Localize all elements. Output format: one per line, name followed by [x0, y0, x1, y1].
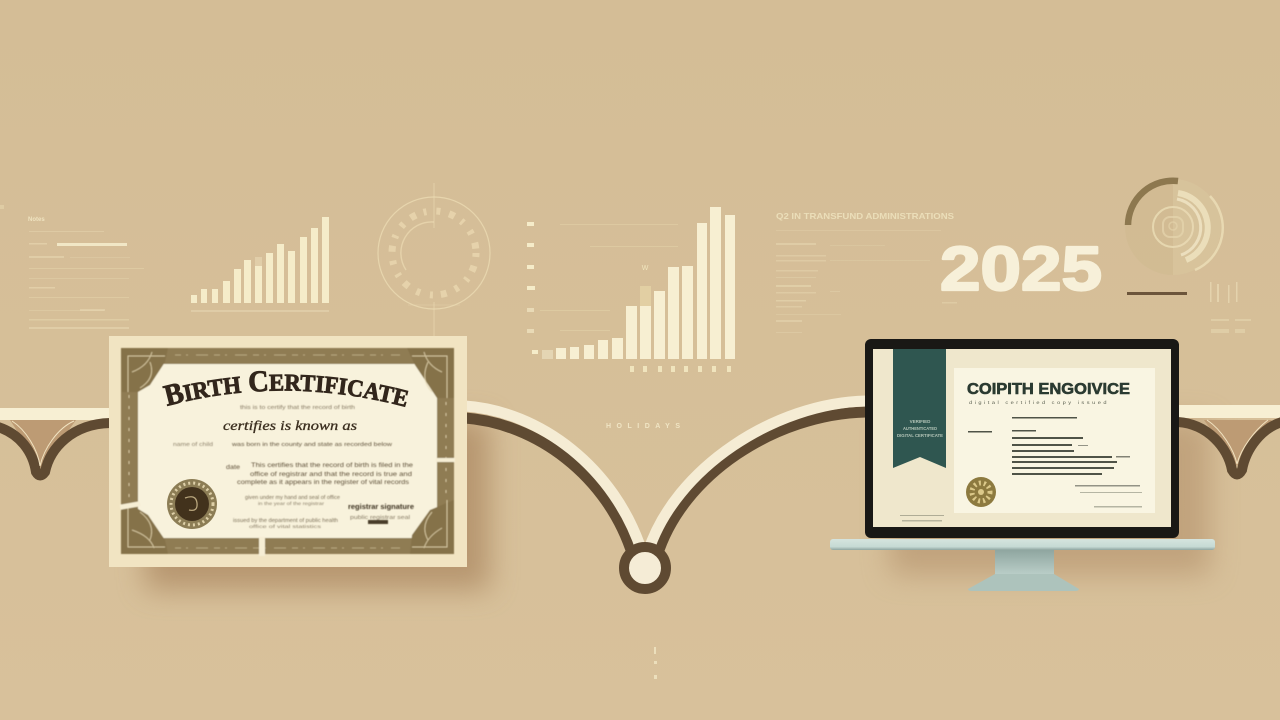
certificate body text: complete as it appears in the register of vital records: [237, 479, 410, 486]
certificate body text: name of child: [173, 442, 213, 448]
left radial gauge: [378, 183, 490, 336]
accent line under chart: [1127, 292, 1187, 295]
border tears: [436, 458, 455, 462]
left notes heading: Notes: [28, 217, 45, 223]
small tick marks right: [1210, 282, 1251, 333]
brown arc: [1128, 181, 1178, 225]
right notes heading: Q2 IN TRANSFUND ADMINISTRATIONS: [776, 211, 954, 221]
bars: [542, 207, 735, 359]
digital certificate title: COIPITH ENGOIVICE: [967, 381, 1130, 398]
stand: [995, 550, 1054, 574]
gold seal: [966, 477, 996, 507]
left notes panel: [0, 205, 144, 329]
certificate body text: given under my hand and seal of office: [245, 495, 340, 501]
bezel: [865, 339, 1179, 538]
certificate body text: office of registrar and that the record is true and: [250, 471, 412, 478]
digital certificate text lines: [900, 417, 1142, 522]
grid lines: [540, 224, 678, 331]
right radial chart: [1125, 179, 1223, 275]
x axis ticks: [630, 366, 731, 372]
corner ornaments: [121, 348, 454, 554]
digital certificate subtitle: digital certified copy issued: [969, 400, 1109, 405]
birth certificate: [109, 336, 467, 567]
certificate body text: in the year of the registrar: [258, 501, 325, 506]
year: 2025: 2025: [940, 235, 1102, 304]
shadow: certificate: [145, 420, 490, 590]
ribbon text: [897, 419, 943, 438]
center chart caption: HOLIDAYS: [606, 423, 683, 430]
timeline: center arcs and node: [465, 401, 866, 589]
certificate seal: [167, 479, 217, 529]
ribbon text: DIGITAL CERTIFICATE: [897, 433, 943, 438]
desktop monitor: [830, 339, 1215, 591]
center bar chart: [527, 207, 735, 372]
certificate title: BIRTH CERTIFICATE: [162, 370, 408, 408]
timeline: left segment: [0, 408, 110, 476]
certificate body text: public registrar seal: [350, 515, 410, 521]
screen: [873, 349, 1171, 527]
base bar: [830, 539, 1215, 550]
cream arcs: [1177, 199, 1201, 255]
left bar chart: [191, 217, 329, 312]
vertical dots: [654, 647, 657, 679]
ribbon: [893, 349, 946, 468]
ornate border: [120, 348, 455, 556]
certificate body text: This certifies that the record of birth is filed in the: [251, 462, 413, 469]
y axis ticks: [527, 222, 538, 354]
certificate body text: [173, 405, 414, 529]
certificate body text: registrar signature: [348, 504, 414, 511]
certificate body text: office of vital statistics: [249, 524, 322, 529]
stand foot: [968, 574, 1079, 591]
certificate body text: issued by the department of public health: [233, 518, 338, 524]
timeline: right segment: [1178, 405, 1280, 474]
certificate body text: was born in the county and state as recorded below: [232, 442, 393, 448]
ribbon text: VERIFIED: [910, 419, 931, 424]
shadow: monitor: [890, 420, 1210, 575]
certificate body text: this is to certify that the record of birth: [240, 405, 355, 411]
ribbon text: AUTHENTICATED: [903, 426, 938, 431]
highlight label: W: [642, 265, 649, 272]
paper: [109, 336, 467, 567]
certificate body text: date: [226, 465, 241, 471]
digital certificate sheet: [954, 368, 1155, 513]
certificate subtitle: certifies is known as: [223, 419, 358, 434]
